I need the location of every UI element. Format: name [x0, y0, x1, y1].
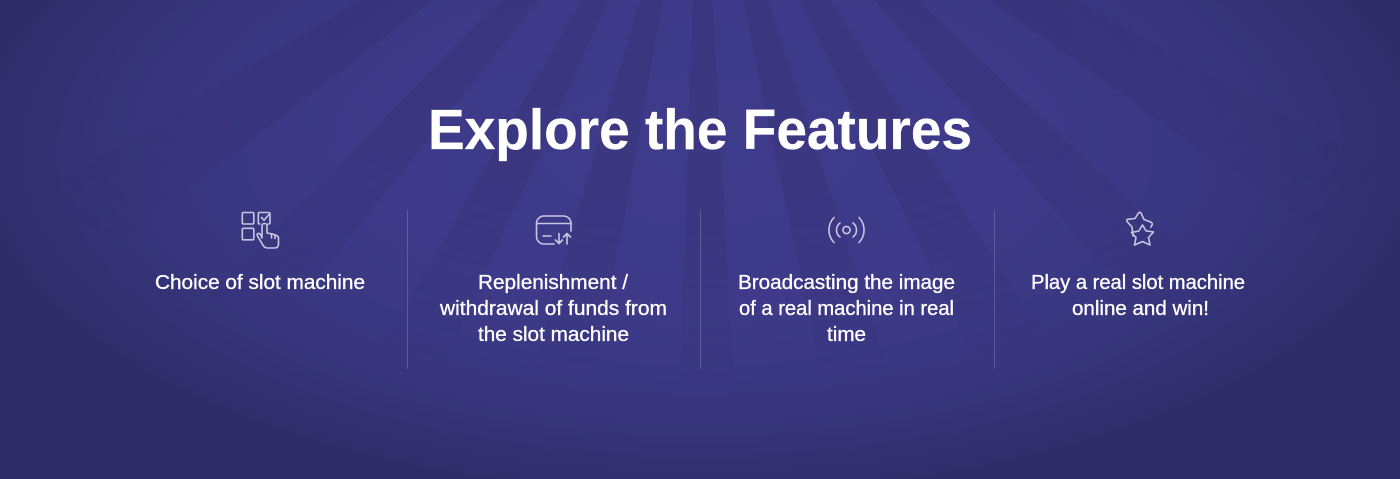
panel: choice of slot machine [155, 212, 365, 294]
icon: broadcast signal [829, 218, 864, 242]
icon: card with arrows [536, 216, 571, 244]
label text: Replenishment / [478, 272, 628, 294]
panel: play and win [1031, 212, 1245, 320]
sunburst rays [318, 0, 1078, 234]
label text: Choice of slot machine [155, 272, 365, 294]
panel: broadcasting [738, 218, 955, 346]
label text: Broadcasting the image [738, 272, 955, 294]
title: Explore the Features [428, 98, 972, 162]
label text: of a real machine in real [739, 298, 954, 320]
label text: Play a real slot machine [1031, 272, 1245, 294]
label text: withdrawal of funds from [439, 298, 667, 320]
divider [407, 210, 408, 369]
label text [439, 272, 667, 346]
panel: replenishment and withdrawal [439, 216, 667, 346]
divider [700, 210, 701, 369]
divider [994, 210, 995, 369]
label text [738, 272, 955, 346]
label text: the slot machine [478, 324, 629, 346]
icon: grid with pointing hand [242, 212, 278, 248]
label text [1031, 272, 1245, 320]
label text: time [827, 324, 866, 346]
icon: two stars [1127, 212, 1154, 245]
label text: online and win! [1072, 298, 1209, 320]
